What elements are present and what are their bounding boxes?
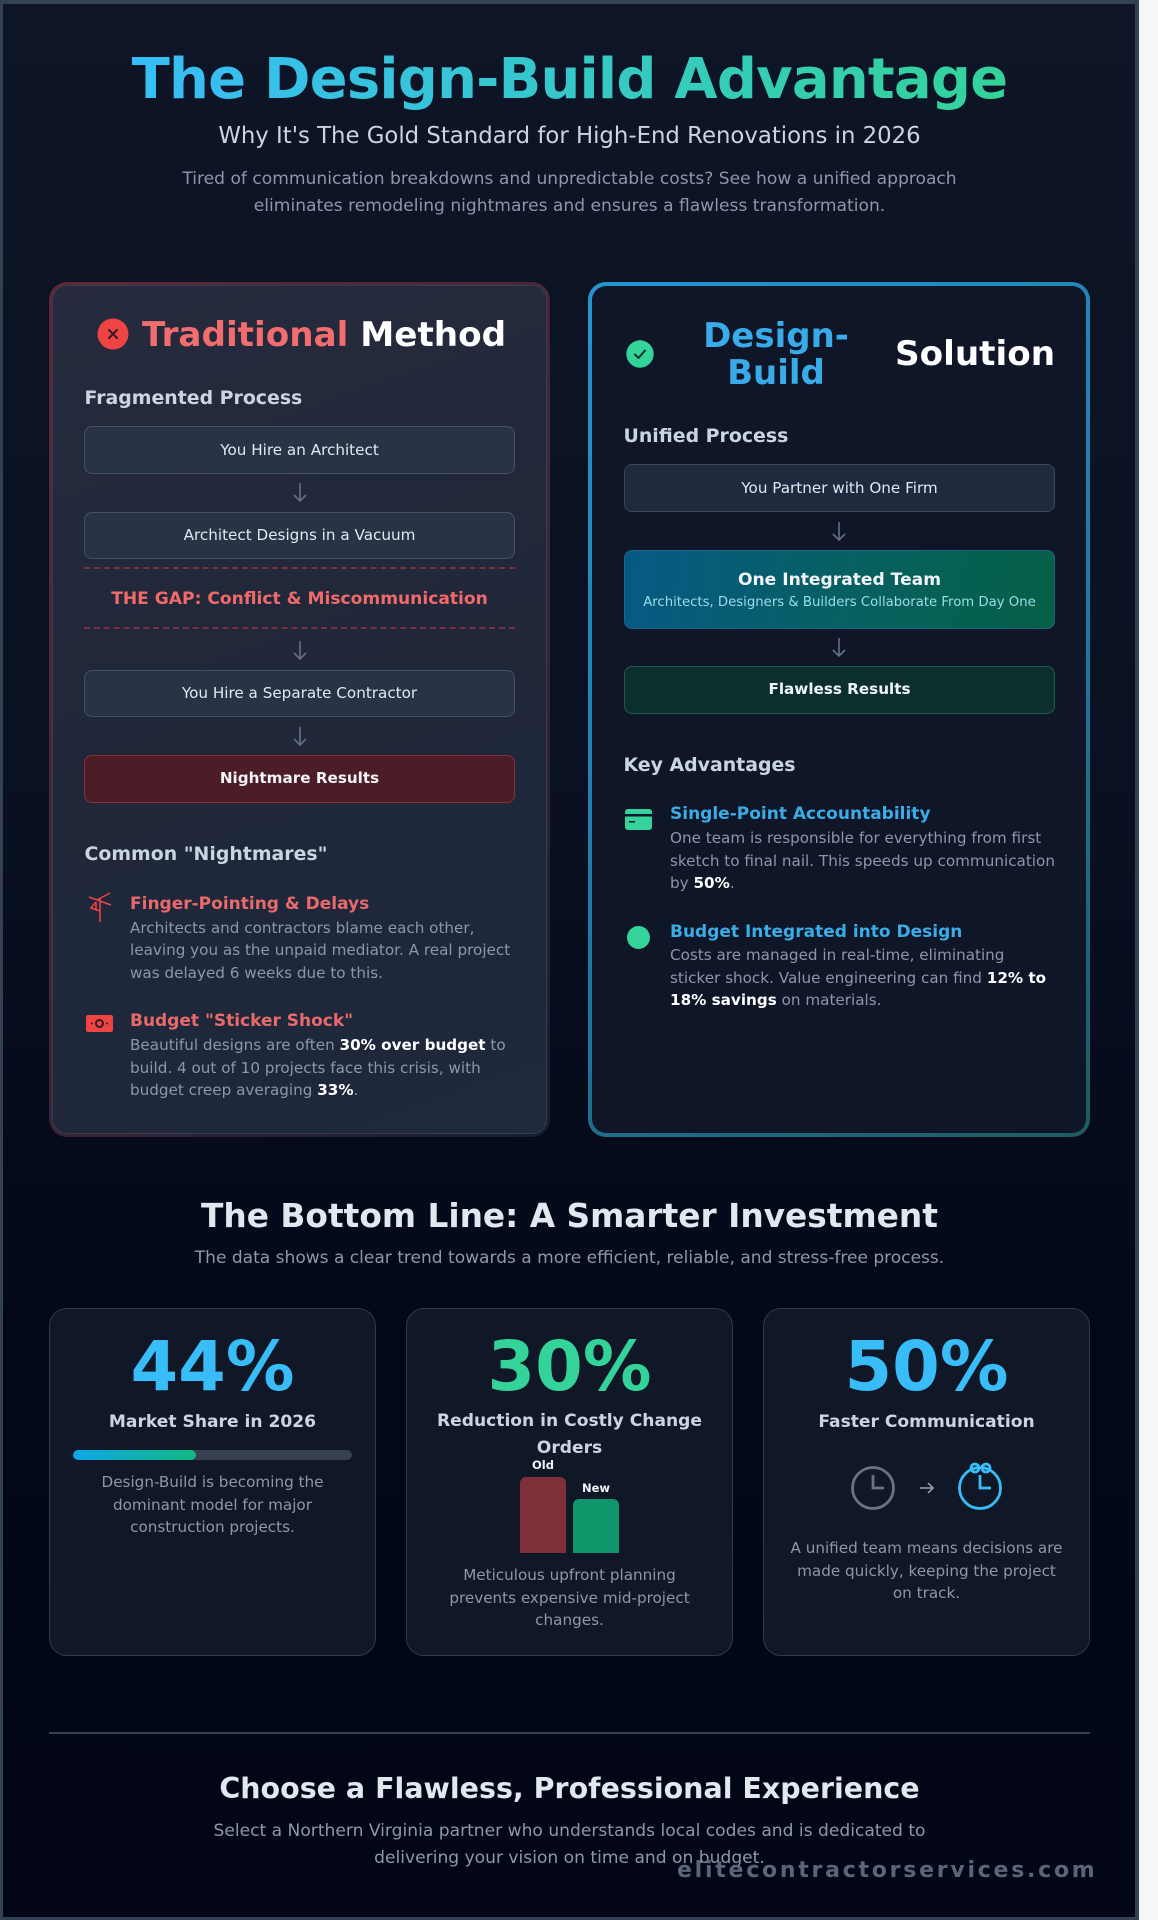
item body [130, 918, 510, 982]
label: old: Old [532, 1458, 554, 1472]
arrow [294, 727, 306, 746]
bar: old [520, 1477, 566, 1553]
arrow [832, 638, 846, 657]
icon: x circle [98, 318, 128, 350]
item body: budget creep averaging 33%. [130, 1081, 358, 1099]
heading: solution: Solution [895, 334, 1055, 374]
icon: fast clock [958, 1462, 1002, 1510]
stat description [790, 1539, 1062, 1602]
progress bar [73, 1450, 352, 1460]
stat number: 30% [488, 1327, 651, 1407]
stat description: changes. [535, 1611, 604, 1629]
item heading: Finger-Pointing & Delays [130, 894, 369, 914]
stat label: Faster Communication [818, 1412, 1035, 1432]
nightmare: budget shock [130, 1011, 506, 1099]
item body: One team is responsible for everything from first [670, 829, 1041, 847]
heading: fragmented process: Fragmented Process [84, 387, 302, 409]
item body: sketch to final nail. This speeds up communication [670, 852, 1055, 870]
heading: design-build [703, 316, 849, 392]
step: architect designs [84, 512, 515, 559]
section heading: bottom line [194, 1197, 944, 1268]
step: partner [624, 464, 1055, 512]
stat description [102, 1473, 323, 1536]
intro text: eliminates remodeling nightmares and ensures a flawless transformation. [254, 196, 885, 216]
panel: traditional method [49, 282, 550, 1137]
item body: build. 4 out of 10 projects face this crisis, with [130, 1059, 481, 1077]
item body: Costs are managed in real-time, eliminating [670, 946, 1004, 964]
panel: design-build solution [588, 282, 1090, 1137]
stat description: construction projects. [130, 1518, 295, 1536]
step: flawless results: Flawless Results [768, 680, 911, 698]
icon: finger pointing [88, 892, 112, 922]
stat number: 44% [131, 1327, 294, 1407]
step: partner: You Partner with One Firm [741, 479, 938, 497]
stat card: change orders [406, 1308, 733, 1656]
arrow [294, 641, 306, 660]
footer call to action [213, 1772, 926, 1868]
label: new: New [582, 1481, 610, 1495]
icon: budget [86, 1015, 113, 1032]
item body [670, 946, 1046, 1009]
heading: design-build: Build [727, 352, 825, 392]
stat number: 50% [845, 1327, 1008, 1407]
nightmare: finger pointing [130, 894, 510, 982]
item body [130, 1036, 506, 1099]
footer heading: Choose a Flawless, Professional Experience [219, 1772, 920, 1804]
icon: old clock [851, 1466, 895, 1510]
item body: 18% savings on materials. [670, 991, 881, 1009]
item heading: Single-Point Accountability [670, 804, 931, 824]
step: nightmare results: Nightmare Results [220, 769, 379, 787]
title: The Design-Build Advantage [132, 46, 1007, 112]
step: nightmare results [84, 755, 515, 803]
watermark: elitecontractorservices.com [677, 1858, 1097, 1883]
item body [670, 829, 1055, 892]
icon: arrow [920, 1482, 934, 1494]
bar: new [573, 1499, 619, 1553]
item body: sticker shock. Value engineering can find 12% to [670, 969, 1046, 987]
stat description: Design-Build is becoming the [102, 1473, 323, 1491]
footer text: Select a Northern Virginia partner who understands local codes and is dedicated to [213, 1821, 926, 1841]
heading: key advantages: Key Advantages [624, 754, 796, 776]
stat label: Market Share in 2026 [109, 1412, 316, 1432]
step: architect designs: Architect Designs in a Vacuum [184, 526, 415, 544]
step: hire architect: You Hire an Architect [220, 441, 379, 459]
arrow [294, 483, 306, 502]
item body: Beautiful designs are often 30% over budget to [130, 1036, 506, 1054]
heading: unified process: Unified Process [624, 425, 788, 447]
step: flawless results [624, 666, 1055, 714]
subheading: The data shows a clear trend towards a more efficient, reliable, and stress-free process. [195, 1248, 944, 1268]
team subtitle: Architects, Designers & Builders Collaborate From Day One [643, 595, 1036, 610]
advantage: budget [670, 922, 1046, 1009]
divider [49, 1732, 1090, 1734]
stat card: faster communication [763, 1308, 1090, 1656]
icon: card [625, 809, 652, 830]
footer text: delivering your vision on time and on budget. [374, 1848, 765, 1868]
item heading: Budget "Sticker Shock" [130, 1011, 353, 1031]
stat description: prevents expensive mid-project [449, 1589, 690, 1607]
bar chart [520, 1458, 619, 1553]
team title: One Integrated Team [738, 570, 941, 590]
heading: design-build: Design- [703, 316, 849, 356]
item body: by 50%. [670, 874, 735, 892]
header [132, 46, 1007, 216]
icon: dot [627, 926, 650, 949]
heading: traditional: Traditional Method [142, 315, 506, 355]
step: hire architect [84, 426, 515, 474]
gap callout [84, 567, 515, 629]
arrow [832, 522, 846, 541]
heading: common nightmares: Common "Nightmares" [84, 843, 328, 865]
heading: The Bottom Line: A Smarter Investment [201, 1197, 938, 1235]
item heading: Budget Integrated into Design [670, 922, 962, 942]
subtitle: Why It's The Gold Standard for High-End Renovations in 2026 [218, 123, 921, 149]
step: hire contractor: You Hire a Separate Contractor [182, 684, 417, 702]
step: integrated team [624, 550, 1055, 629]
stat label: Reduction in Costly Change [437, 1411, 702, 1431]
item body: was delayed 6 weeks due to this. [130, 964, 383, 982]
stat card: market share [49, 1308, 376, 1656]
stat description: dominant model for major [113, 1496, 312, 1514]
stat description: Meticulous upfront planning [463, 1566, 676, 1584]
stat description: made quickly, keeping the project [797, 1562, 1056, 1580]
footer text [213, 1821, 926, 1868]
item body: Architects and contractors blame each other, [130, 918, 474, 936]
stat description: on track. [893, 1584, 960, 1602]
stat label: Orders [537, 1438, 602, 1458]
icon: check circle [626, 340, 654, 368]
advantage: accountability [670, 804, 1055, 892]
step: hire contractor [84, 670, 515, 717]
stat description [449, 1566, 690, 1629]
stat label [437, 1411, 702, 1458]
gap callout: THE GAP: Conflict & Miscommunication [111, 589, 488, 609]
item body: leaving you as the unpaid mediator. A real project [130, 941, 510, 959]
intro text: Tired of communication breakdowns and unpredictable costs? See how a unified approach [182, 169, 957, 189]
stat description: A unified team means decisions are [790, 1539, 1062, 1557]
intro text [182, 169, 957, 216]
